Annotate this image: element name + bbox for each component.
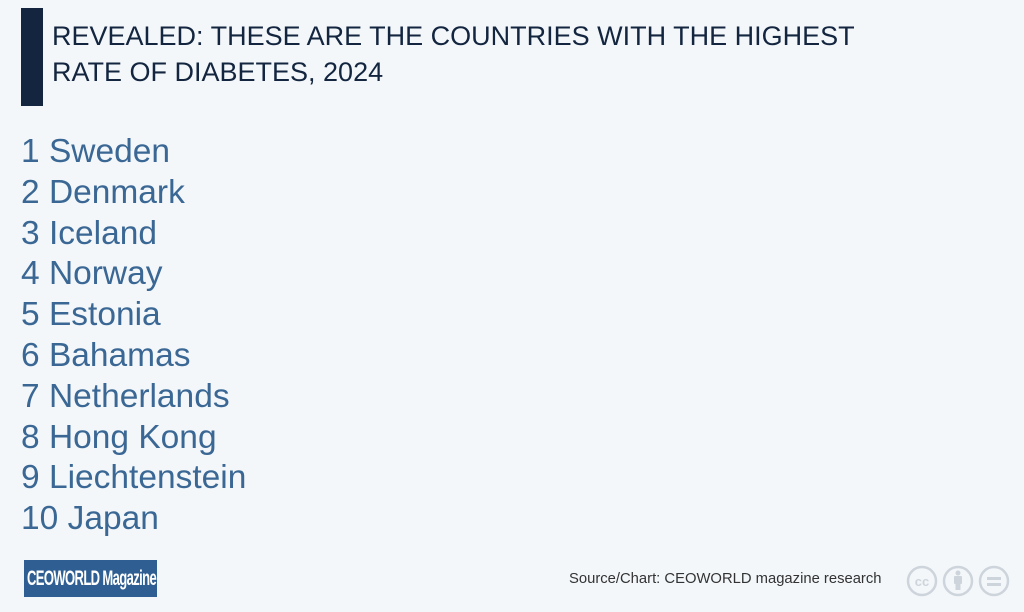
ranked country list: 3 Iceland [21,215,157,252]
ranked country list: 2 Denmark [21,174,185,211]
logo: CEOWORLD Magazine [27,567,156,590]
ranked country list: 9 Liechtenstein [21,459,246,496]
ranked country list: 1 Sweden [21,133,170,170]
ranked country list: 5 Estonia [21,296,161,333]
ranked country list: 10 Japan [21,500,159,537]
title: RATE OF DIABETES, 2024 [52,57,383,87]
title [52,21,855,87]
ranked country list: 6 Bahamas [21,337,190,374]
logo [24,560,157,597]
ranked country list [21,133,246,537]
title accent bar [21,8,43,106]
ranked country list: 4 Norway [21,255,162,292]
icon: creative commons [906,566,1010,596]
icon: creative commons: cc [915,574,929,589]
ranked country list: 7 Netherlands [21,378,230,415]
title: REVEALED: THESE ARE THE COUNTRIES WITH THE HIGHEST [52,21,855,51]
source text: Source/Chart: CEOWORLD magazine research [569,571,882,587]
ranked country list: 8 Hong Kong [21,419,217,456]
